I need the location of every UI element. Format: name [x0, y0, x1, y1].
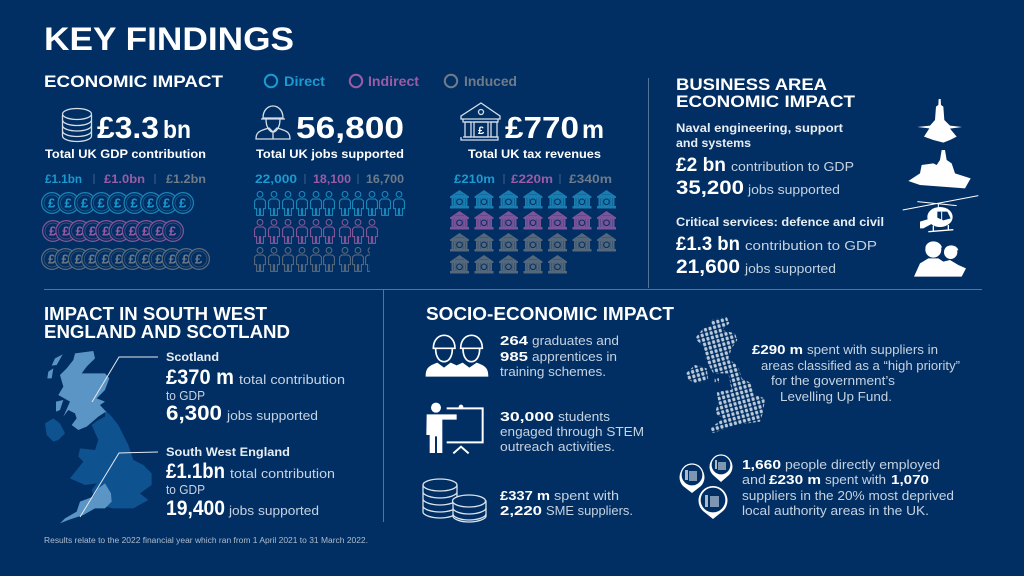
icon: bank	[461, 103, 500, 140]
heading: regional impact	[44, 304, 290, 342]
icon: helicopter	[903, 196, 978, 232]
block: South West England: South West England	[166, 445, 290, 459]
block: critical services: jobs supported	[744, 262, 836, 276]
block: critical services: Critical services: defence and civil	[676, 215, 884, 229]
block: Scotland: total contribution	[239, 372, 345, 387]
coins: direct: £££££££££	[48, 196, 187, 210]
text: high priority: for the government’s	[771, 373, 896, 388]
icon: map pins	[680, 455, 732, 519]
icon: engineers	[426, 335, 488, 377]
footnote: Results relate to the 2022 financial year which ran from 1 April 2021 to 31 March 2022.	[44, 536, 368, 545]
coins: indirect: ££££££££££	[49, 224, 177, 238]
text: high priority: areas classified as a “high priority”	[761, 358, 960, 373]
text: deprived areas	[742, 457, 954, 518]
text: graduates: training schemes.	[500, 364, 606, 379]
stat: tax: £210m	[454, 172, 495, 186]
block: Scotland: 6,300	[166, 402, 222, 425]
block: Scotland	[166, 350, 345, 425]
block: critical services: 21,600	[676, 257, 740, 278]
banks: induced	[450, 233, 616, 274]
block: naval: 35,200	[676, 178, 744, 199]
stat: tax: £770	[505, 110, 579, 145]
text: graduates	[500, 333, 619, 379]
block: Scotland: jobs supported	[226, 408, 318, 423]
text: high priority	[752, 342, 960, 404]
stat: GDP: bn	[163, 116, 191, 144]
panel: economic impact	[42, 72, 616, 274]
text: graduates: graduates and	[532, 333, 619, 348]
text: SME	[500, 488, 633, 518]
block: naval: £2 bn	[676, 155, 726, 176]
icon: dotted UK map	[686, 317, 765, 433]
stat: GDP: £1.1bn	[45, 172, 82, 186]
panel: business area economic impact	[676, 75, 978, 278]
heading: business area: ECONOMIC IMPACT	[676, 92, 856, 111]
people: direct	[255, 192, 404, 215]
text: deprived areas: £230 m	[769, 472, 821, 487]
map: UK highlighted	[45, 351, 152, 523]
block: Scotland: Scotland	[166, 350, 219, 364]
icon: jet	[917, 99, 962, 143]
stat: tax: Total UK tax revenues	[468, 147, 601, 161]
panel: socio-economic impact	[423, 304, 960, 522]
text: students: 30,000	[500, 409, 554, 424]
heading: business area	[676, 75, 856, 111]
stat: GDP	[42, 108, 209, 269]
block: critical services: £1.3 bn	[676, 234, 740, 255]
heading: socio-economic: SOCIO-ECONOMIC IMPACT	[426, 304, 674, 324]
legend: Induced	[464, 74, 517, 89]
people: induced	[255, 248, 376, 271]
text: students	[500, 409, 644, 454]
stat: tax: £	[478, 125, 484, 137]
block: South West England: to GDP	[166, 482, 205, 497]
block: South West England	[166, 445, 335, 520]
heading: economic impact: ECONOMIC IMPACT	[44, 72, 224, 91]
stat: GDP: £1.0bn	[104, 172, 145, 186]
text: SME: £337 m	[500, 488, 550, 503]
icon: coin stack	[62, 108, 92, 142]
heading: regional impact: ENGLAND AND SCOTLAND	[44, 322, 290, 342]
text: deprived areas: spent with	[825, 472, 886, 487]
stat: jobs: 18,100	[313, 172, 351, 186]
text: deprived areas: 1,070	[891, 472, 929, 487]
icon: coins	[423, 479, 486, 522]
stat: GDP: Total UK GDP contribution	[45, 147, 206, 161]
stat: tax	[450, 103, 616, 274]
text: deprived areas: and	[742, 472, 766, 487]
block: naval	[676, 121, 854, 199]
block: naval: and systems	[676, 136, 751, 150]
block: South West England: 19,400	[166, 497, 225, 520]
stat: jobs	[255, 106, 404, 271]
stat: GDP: £3.3	[97, 110, 159, 145]
block: Scotland: £370 m	[166, 366, 234, 389]
heading: business area: BUSINESS AREA	[676, 75, 827, 94]
text: graduates: 985	[500, 349, 528, 364]
text: students: engaged through STEM	[500, 424, 644, 439]
coins: direct	[42, 193, 193, 213]
stat: tax: m	[582, 116, 604, 144]
text: deprived areas: suppliers in the 20% most deprived	[742, 488, 954, 503]
stat: tax: £220m	[511, 172, 553, 186]
text: SME: SME suppliers.	[546, 503, 633, 518]
text: deprived areas: 1,660	[742, 457, 781, 472]
block: critical services	[676, 215, 884, 278]
block: South West England: £1.1bn	[166, 460, 225, 483]
stat: tax: £340m	[569, 172, 612, 186]
block: naval: jobs supported	[747, 183, 840, 197]
icon: teacher at board	[426, 403, 483, 453]
banks: direct	[450, 190, 616, 208]
coins: induced: ££££££££££££	[48, 252, 203, 266]
text: graduates: 264	[500, 333, 529, 348]
text: SME: spent with	[554, 488, 619, 503]
block: South West England: jobs supported	[228, 503, 319, 518]
icon: worker	[256, 106, 290, 139]
text: deprived areas: people directly employed	[785, 457, 940, 472]
text: graduates: apprentices in	[532, 349, 617, 364]
block: naval: contribution to GDP	[731, 160, 854, 174]
title: KEY FINDINGS	[44, 21, 294, 57]
legend: Direct	[284, 74, 326, 89]
block: South West England: total contribution	[230, 466, 335, 481]
stat: jobs: Total UK jobs supported	[256, 147, 404, 161]
block: naval: Naval engineering, support	[676, 121, 843, 135]
text: high priority: £290 m	[752, 342, 803, 357]
text: high priority: Levelling Up Fund.	[780, 389, 892, 404]
text: deprived areas: local authority areas in the UK.	[742, 503, 929, 518]
callout lines	[80, 357, 158, 517]
icon: two workers	[914, 241, 966, 277]
stat: jobs: 56,800	[296, 110, 404, 145]
icons: business silhouettes	[903, 99, 978, 277]
legend	[265, 74, 517, 89]
people: indirect	[255, 220, 377, 243]
text: students: students	[558, 409, 611, 424]
text: students: outreach activities.	[500, 439, 615, 454]
icon: ship	[908, 150, 971, 188]
block: Scotland: to GDP	[166, 388, 205, 403]
block: critical services: contribution to GDP	[745, 239, 877, 253]
stat: jobs: 16,700	[366, 172, 404, 186]
stat: jobs: 22,000	[255, 172, 297, 186]
panel: south west and Scotland	[44, 304, 368, 545]
heading: regional impact: IMPACT IN SOUTH WEST	[44, 304, 267, 324]
legend: Indirect	[368, 74, 420, 89]
text: high priority: spent with suppliers in	[807, 342, 938, 357]
coins: indirect	[43, 221, 183, 241]
coins: induced	[42, 249, 209, 269]
banks: indirect	[450, 211, 616, 230]
text: SME: 2,220	[500, 503, 542, 518]
stat: GDP: £1.2bn	[166, 172, 206, 186]
